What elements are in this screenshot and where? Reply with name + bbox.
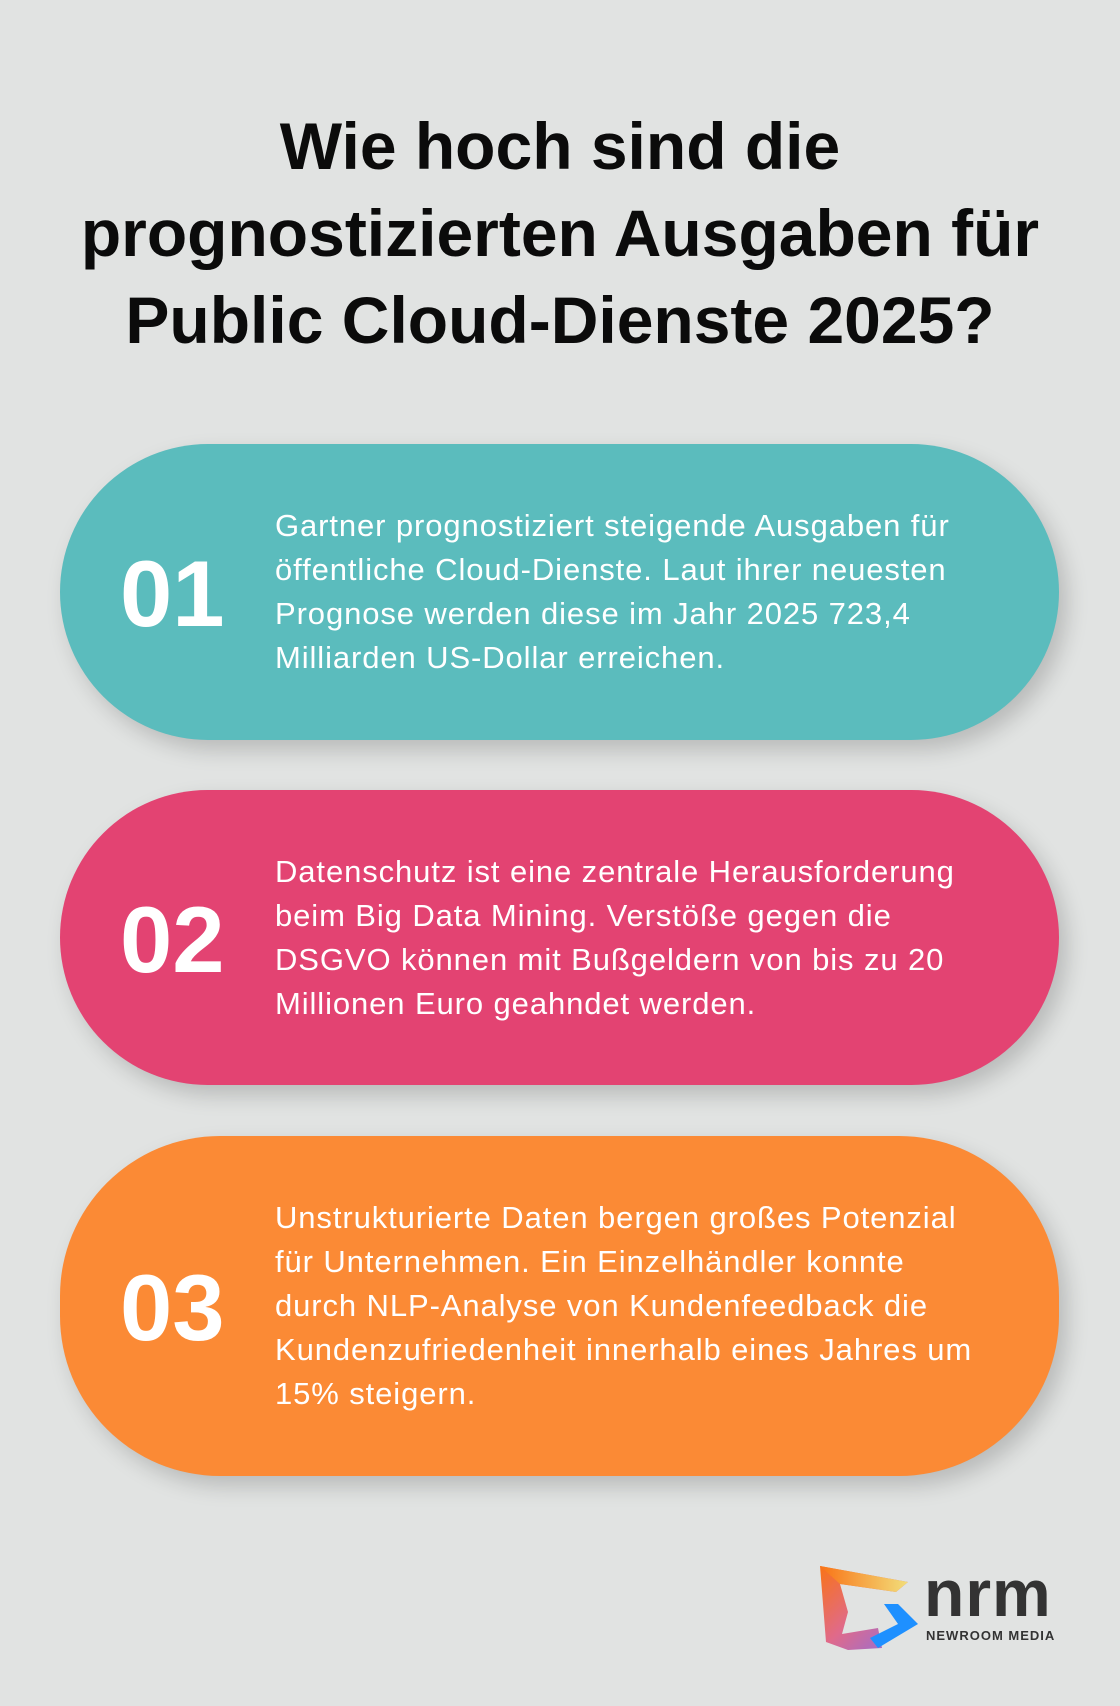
panel: 01 <box>60 444 1059 740</box>
text 03: Unstrukturierte Daten bergen großes Potenzial für Unternehmen. Ein Einzelhändler konnte durch NLP-Analyse von Kundenfeedback die Kundenzufriedenheit innerhalb eines Jahres um 15% steigern. <box>275 1200 972 1411</box>
brand name: nrm <box>924 1556 1052 1630</box>
panel: 03 <box>60 1136 1059 1476</box>
title: Public Cloud-Dienste 2025? <box>125 283 995 357</box>
tagline: NEWROOM MEDIA <box>926 1628 1055 1643</box>
icon: logo mark <box>820 1566 918 1650</box>
number 01: 01 <box>120 541 225 646</box>
title: prognostizierten Ausgaben für <box>81 196 1039 270</box>
number 03: 03 <box>120 1255 225 1360</box>
number 02: 02 <box>120 887 225 992</box>
title: Wie hoch sind die <box>280 109 840 183</box>
title <box>81 109 1039 357</box>
logo <box>820 1556 1055 1650</box>
text 02: Datenschutz ist eine zentrale Herausforderung beim Big Data Mining. Verstöße gegen die DSGVO können mit Bußgeldern von bis zu 20 Millionen Euro geahndet werden. <box>275 854 955 1021</box>
panel: 02 <box>60 790 1059 1085</box>
text 01: Gartner prognostiziert steigende Ausgaben für öffentliche Cloud-Dienste. Laut ihrer neuesten Prognose werden diese im Jahr 2025 723,4 Milliarden US-Dollar erreichen. <box>275 508 950 675</box>
